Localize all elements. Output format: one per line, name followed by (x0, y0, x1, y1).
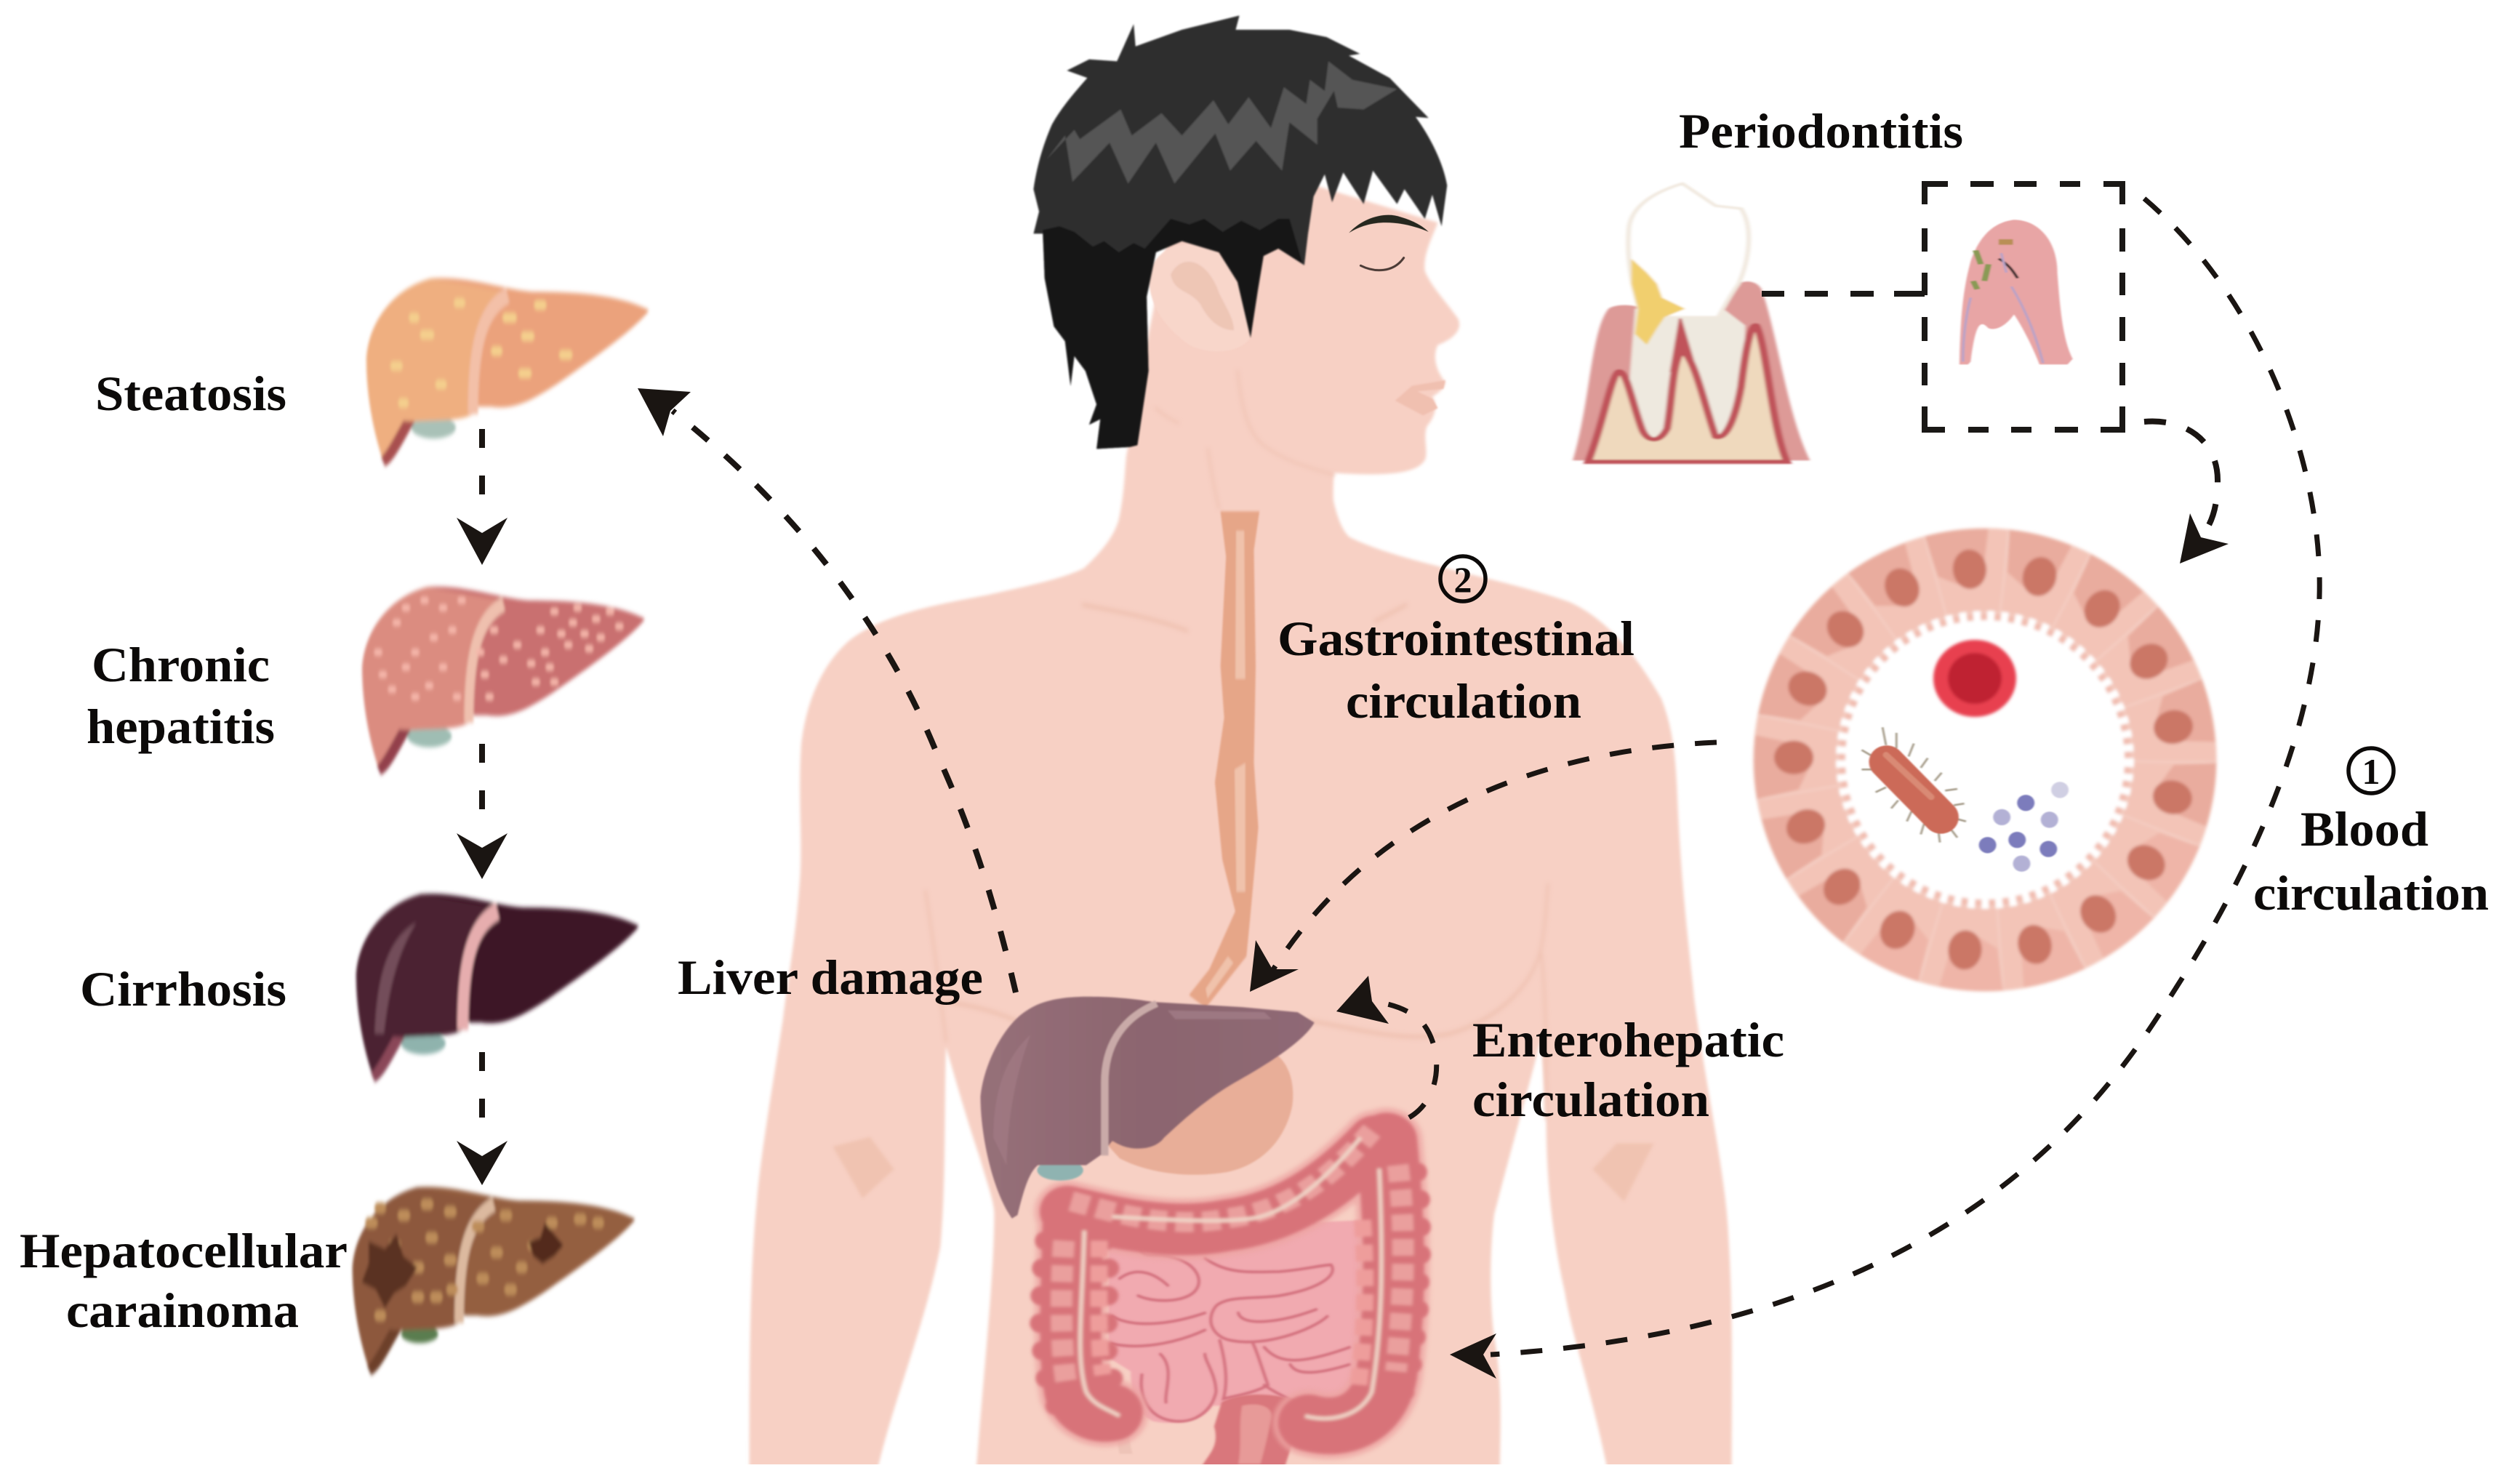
human body figure (750, 15, 1732, 1479)
label: Cirrhosis: Cirrhosis (80, 961, 286, 1016)
stomach (1101, 1048, 1293, 1175)
eyebrow and closed eye (1349, 215, 1429, 270)
arrow: steatosis to chronic hepatitis (457, 429, 508, 565)
label: enterohepatic circulation: circulation (1472, 1072, 1709, 1127)
label: gastrointestinal circulation: Gastrointestinal (1277, 611, 1634, 666)
number badge 1 (2348, 748, 2394, 793)
arrow: liver damage (638, 388, 1016, 992)
gallbladder (1038, 1160, 1083, 1181)
number badge 2: 2 (1454, 559, 1472, 600)
icon: purple particles (1979, 782, 2069, 872)
label: enterohepatic circulation (1472, 1012, 1784, 1127)
panel: periodontitis (1573, 103, 2122, 462)
head: ear, face details and hair (1033, 15, 1447, 449)
connector: tooth to callout box (1762, 291, 1925, 297)
label: Steatosis: Steatosis (95, 366, 286, 421)
label: Chronic hepatitis: Chronic (92, 637, 270, 692)
label: Hepatocellular carainoma: Hepatocellular (20, 1223, 348, 1278)
heading: Periodontitis: Periodontitis (1679, 103, 1963, 159)
liver: steatosis (366, 278, 649, 466)
arrow: enterohepatic circulation (1336, 976, 1437, 1118)
label: gastrointestinal circulation: circulation (1346, 673, 1581, 729)
large intestine (1040, 1131, 1421, 1426)
panel: liver disease progression (20, 278, 649, 1375)
falciform ligament (1104, 1003, 1157, 1155)
liver: hepatocellular carcinoma (353, 1187, 635, 1375)
label: gastrointestinal circulation (1277, 556, 1634, 729)
body shading folds (926, 371, 1548, 1118)
arrow: gastrointestinal circulation (1250, 742, 1717, 992)
icon: magnified gum tissue (1960, 220, 2073, 364)
central liver (980, 997, 1315, 1219)
arrow: cirrhosis to carcinoma (457, 1052, 508, 1185)
elbow creases (833, 1137, 1653, 1201)
arrow: gum to intestinal cross-section (2144, 422, 2229, 563)
label: Liver damage: Liver damage (678, 950, 983, 1005)
label: Chronic hepatitis: hepatitis (87, 699, 275, 754)
body silhouette with arms (750, 185, 1732, 1479)
panel: intestinal epithelium cross-section (1753, 526, 2220, 994)
liver: chronic hepatitis (362, 587, 645, 775)
liver: cirrhosis (356, 894, 639, 1082)
label: blood circulation: circulation (2253, 865, 2489, 921)
rectum (1201, 1393, 1291, 1464)
icon: bacterium (1861, 727, 1966, 843)
label: blood circulation: Blood (2301, 801, 2428, 857)
number badge 1: 1 (2362, 751, 2380, 792)
arrow: chronic hepatitis to cirrhosis (457, 744, 508, 879)
number badge 2 (1440, 556, 1485, 601)
callout box: magnified gum (1925, 184, 2122, 430)
label: blood circulation (2253, 748, 2489, 921)
esophagus (1189, 511, 1259, 1008)
hair (1033, 15, 1447, 449)
label: Chronic hepatitis (87, 637, 275, 754)
epithelial cell ring (1753, 526, 2220, 994)
ear (1149, 244, 1251, 351)
label: enterohepatic circulation: Enterohepatic (1472, 1012, 1784, 1067)
lips (1395, 380, 1445, 415)
colon and small intestine (1040, 1131, 1421, 1467)
liver lobes (980, 997, 1315, 1219)
arrow: blood circulation (1450, 198, 2319, 1379)
icon: red blood cell (1933, 640, 2016, 717)
label: Hepatocellular carainoma (20, 1223, 348, 1338)
appendix (1119, 1443, 1131, 1453)
label: Hepatocellular carainoma: carainoma (66, 1283, 299, 1338)
small intestine (1108, 1220, 1365, 1423)
icon: tooth with gum and calculus (1573, 183, 1810, 462)
